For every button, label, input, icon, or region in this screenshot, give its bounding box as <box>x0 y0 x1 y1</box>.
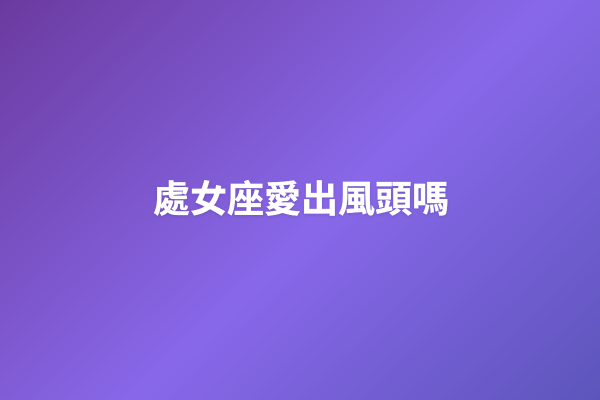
title: 處女座愛出風頭嗎 <box>153 179 449 220</box>
